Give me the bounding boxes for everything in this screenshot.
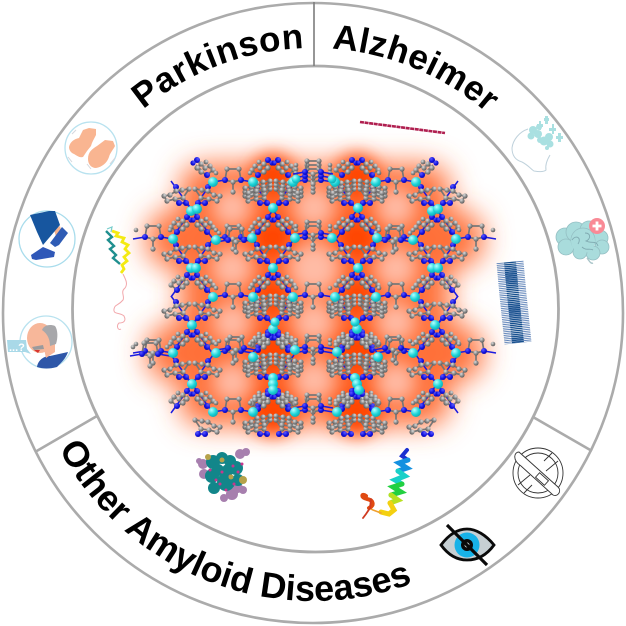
icon: trembling hands	[65, 122, 117, 174]
icon: head with scattered particles	[512, 116, 563, 172]
icon: vision loss eye	[441, 525, 494, 565]
icon: speech difficulty face: ...?	[9, 342, 25, 354]
icon: red amyloid fibril	[360, 122, 445, 133]
icon: blue beta-sheet fibril	[510, 262, 518, 343]
inner ring	[72, 66, 558, 552]
icon: speech difficulty face	[7, 316, 72, 368]
orange glow behind framework	[146, 154, 484, 436]
icon: rainbow helix peptide	[362, 450, 408, 518]
icon: protein complex	[196, 448, 250, 502]
metal-organic framework lattice	[130, 157, 496, 437]
heading: Parkinson: Parkinson	[130, 30, 302, 108]
icon: shuffling feet	[19, 211, 75, 267]
ring dividers	[35, 2, 592, 452]
heading: Other Amyloid Diseases: Other Amyloid Diseases	[63, 441, 410, 602]
icon: brain with plus badge	[556, 218, 609, 263]
heading: Alzheimer: Alzheimer	[332, 26, 498, 109]
icon: crossed-out circle symbol	[513, 448, 563, 498]
icon: alpha-synuclein structure	[106, 227, 129, 329]
